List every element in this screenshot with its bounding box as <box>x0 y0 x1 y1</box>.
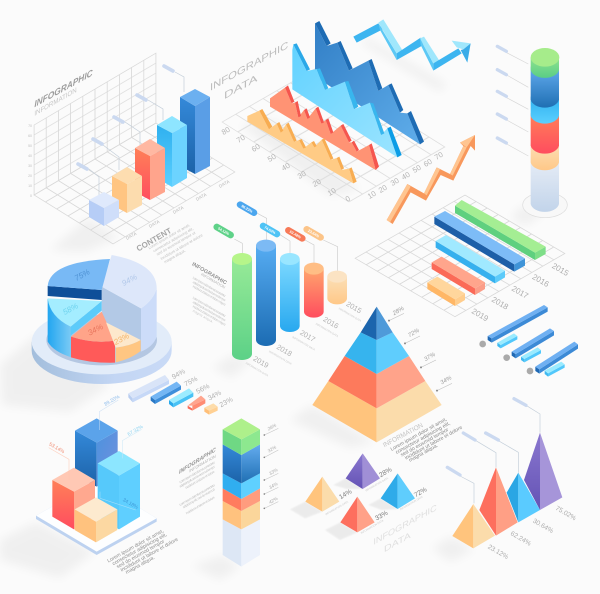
base disc <box>32 309 172 384</box>
year labels <box>470 261 571 324</box>
year labels: 2016 <box>322 315 340 331</box>
bar chart axis numbers: 10 <box>28 184 32 188</box>
bar chart axis numbers: 20 <box>28 174 32 178</box>
arrow: blue zigzag <box>353 19 471 71</box>
column text block: INFOGRAPHIC <box>179 447 216 476</box>
area chart heading <box>210 39 289 102</box>
layer orange <box>312 381 442 442</box>
mini percentage bars: 34% <box>207 390 223 402</box>
pyramid orange <box>305 477 339 512</box>
area chart axis labels: 80 <box>220 125 232 137</box>
cube labels: 34.18% <box>121 497 139 511</box>
bar chart leaders and pills <box>78 66 184 195</box>
year labels: INFORMATION DATA <box>315 322 339 338</box>
value pills <box>212 200 325 243</box>
content text block <box>135 223 203 264</box>
column text block: Lorem ipsum dolor sit amet, consectetur <box>178 483 216 507</box>
stacked cylinder leaders <box>497 46 528 156</box>
triangle values <box>486 505 577 561</box>
bar 3 red <box>135 139 165 200</box>
triangle red <box>479 467 518 536</box>
information text block: Lorem ipsum dolor sit amet, <box>390 417 448 453</box>
cylinder orange <box>327 271 347 304</box>
cube chart caption: incididunt ut labore et dolore <box>120 537 179 573</box>
pie chart <box>32 255 172 384</box>
content text block: Lorem ipsum dolor sit amet, <box>148 223 191 250</box>
year labels: 2019 <box>252 354 270 370</box>
cylinder chart text block: Lorem ipsum dolor sit amet, consectetur <box>192 296 227 318</box>
pie labels: 94% <box>120 272 139 288</box>
triangle orange <box>452 504 495 548</box>
segment orange <box>223 501 260 529</box>
cube sky <box>98 451 140 529</box>
bar chart axis numbers <box>28 124 32 198</box>
arrow: orange rising <box>387 135 475 224</box>
small pyramid labels: 14% <box>338 488 353 501</box>
triangle values: 75.02% <box>554 505 577 522</box>
value pills: 74.53% <box>263 225 277 235</box>
area chart axis labels: 10 <box>366 189 378 201</box>
cylinder green <box>232 253 252 360</box>
area chart axis labels: 70 <box>235 133 247 145</box>
column text block: Lorem ipsum dolor sit amet, consectetur <box>178 460 216 484</box>
horizontal isometric bars <box>427 200 571 324</box>
column percentages: 33% <box>268 467 279 476</box>
series orange <box>247 109 357 183</box>
cylinder chart text block <box>191 262 228 327</box>
layer red <box>328 356 425 408</box>
cube chart <box>36 394 157 555</box>
infographic data watermark: INFOGRAPHIC <box>373 502 437 547</box>
content text block: consectetur adipisicing elit, <box>152 227 194 253</box>
pyramid sky <box>381 473 415 509</box>
platform <box>36 482 157 555</box>
small pyramid labels: 72% <box>413 486 428 499</box>
year labels: 2018 <box>490 295 510 312</box>
layer navy <box>361 307 393 340</box>
small pyramid labels: INFORMATION DATA <box>324 500 349 516</box>
cylinder red <box>304 263 324 318</box>
area chart axis labels: 40 <box>280 161 292 173</box>
slice sky <box>48 298 102 357</box>
triangle values: 23.12% <box>486 544 509 561</box>
slice blue <box>48 259 110 300</box>
year labels: 2019 <box>470 307 490 324</box>
cube chart caption: magna aliqua. <box>125 555 156 576</box>
segment blue <box>223 444 260 483</box>
cube labels: 67.32% <box>127 424 145 438</box>
small pyramids <box>290 453 428 540</box>
cylinder chart <box>212 200 363 378</box>
information text block: sed do eiusmod tempor <box>400 427 450 458</box>
information text block: incididunt ut labore et dolore <box>404 425 464 461</box>
year labels: INFORMATION DATA <box>338 306 362 323</box>
pyramid red <box>340 497 375 532</box>
triangle sky <box>507 473 540 522</box>
content text block: CONTENT <box>135 226 173 253</box>
cylinder blue <box>256 240 276 346</box>
bar 2018 red <box>432 257 485 295</box>
segment green <box>223 418 260 455</box>
value pills: 53.48% <box>289 230 302 240</box>
cylinder chart text block: adipisicing elit, sed do eiusmod tempor <box>192 300 227 323</box>
segment sky <box>223 473 260 499</box>
column text block: adipisicing elit, sed do eiusmod <box>182 487 216 509</box>
column percentages: 32% <box>267 445 277 454</box>
cylinder chart text block: magna aliqua. <box>192 309 214 324</box>
cube chart caption: sed do eiusmod tempor <box>116 539 166 570</box>
column text block: incididunt ut labore et dolore <box>185 495 216 515</box>
bar chart axis numbers: 40 <box>28 154 32 158</box>
content text block: incididunt ut labore et dolore <box>160 233 203 261</box>
column percentages: 28% <box>266 423 277 432</box>
cube labels: 53.14% <box>48 442 66 455</box>
cube leaders <box>49 400 142 510</box>
information text block: consectetur adipisicing elit, <box>395 421 452 456</box>
column text block: incididunt ut labore et dolore <box>184 470 215 490</box>
pyramid purple <box>346 453 380 489</box>
small pyramid labels: INFORMATION DATA <box>399 495 424 511</box>
area chart axis labels: 0 <box>344 194 352 204</box>
cube chart caption: consectetur adipisicing elit, <box>111 532 168 567</box>
bar 2017 sky <box>436 235 505 283</box>
column percentages <box>266 423 279 505</box>
year labels: INFORMATION DATA <box>268 349 293 366</box>
bar chart data labels: DATA <box>148 219 160 229</box>
area chart heading: DATA <box>224 72 258 102</box>
slice orange <box>106 322 141 362</box>
mini percentage bars: 94% <box>171 368 187 381</box>
mini percentage bars: 56% <box>195 383 211 396</box>
bar 5 blue <box>180 89 210 174</box>
tall triangle chart <box>447 399 577 561</box>
bar 2015 green <box>455 200 546 260</box>
year labels: INFORMATION DATA <box>245 361 269 378</box>
small pyramid labels: INFORMATION DATA <box>364 476 389 493</box>
column text block: INFORMATION <box>189 454 216 474</box>
year labels: INFORMATION DATA <box>291 335 316 352</box>
small pyramid labels: 33% <box>374 510 389 522</box>
cube blue <box>75 418 118 487</box>
year labels: 2017 <box>298 328 317 344</box>
stacked square column <box>223 418 279 567</box>
year labels: 2018 <box>275 342 294 358</box>
area chart heading: INFOGRAPHIC <box>210 39 289 94</box>
pie labels: 23% <box>111 331 131 347</box>
cylinder chart text block: adipisicing elit, sed do eiusmod tempor <box>192 280 227 303</box>
base ring <box>523 192 567 218</box>
cube labels: 89.20% <box>103 394 121 408</box>
bar chart axis numbers: 50 <box>28 144 32 148</box>
cylinder chart text block: incididunt ut labore et dolore magna <box>192 304 227 327</box>
area chart axis labels: 20 <box>377 183 389 195</box>
triangle leaders <box>460 405 540 503</box>
year labels: 2015 <box>550 261 571 278</box>
content text block: sed do eiusmod tempor ut <box>156 230 197 257</box>
area chart axis labels: 70 <box>433 150 445 162</box>
information text block <box>382 417 464 464</box>
bar 2019 orange <box>427 277 465 306</box>
area chart axis labels: 60 <box>250 142 262 154</box>
heading: infographic information: INFORMATION <box>34 85 77 118</box>
triangle values: 62.24% <box>509 530 532 548</box>
bar 2 orange <box>112 167 142 213</box>
information text block: magna aliqua. <box>408 443 439 464</box>
area chart series <box>247 21 424 183</box>
infographic data watermark: DATA <box>384 530 412 554</box>
column leaders <box>264 428 278 508</box>
isometric bars <box>89 89 210 226</box>
small pyramid labels <box>324 466 428 535</box>
value pills: 23.64% <box>307 229 321 239</box>
slice periwinkle <box>102 255 157 362</box>
pie labels: 34% <box>86 322 105 338</box>
cylinder chart text block: Lorem ipsum dolor sit amet, consectetur <box>192 276 227 298</box>
pie labels: 75% <box>73 267 91 283</box>
year labels: 2015 <box>345 299 363 315</box>
cylinder leaders <box>234 213 338 271</box>
cylinder chart text block: INFOGRAPHIC <box>191 262 228 286</box>
area chart axis labels: 10 <box>326 186 338 198</box>
bar chart grid wall and floor <box>34 53 235 244</box>
area chart axis labels: 40 <box>400 170 412 182</box>
cylinder chart text block: INFORMATION <box>200 272 226 290</box>
column percentages: 34% <box>268 481 279 490</box>
column percentages: 42% <box>268 496 279 505</box>
pyramid chart <box>312 306 454 442</box>
pyramid percentages <box>391 306 454 386</box>
bar chart axis numbers: 70 <box>28 124 32 128</box>
pie labels <box>61 267 139 347</box>
mini percentage bars <box>128 368 234 415</box>
area chart axis labels: 30 <box>296 169 308 181</box>
pyramid percentages: 72% <box>407 328 421 339</box>
bar chart data labels: DATA <box>218 179 230 189</box>
bar 2016 blue <box>434 211 525 272</box>
cylinder chart text block: incididunt ut labore et dolore magna <box>192 284 227 307</box>
segment pale <box>223 519 260 567</box>
column text block: adipisicing elit, sed do eiusmod tempor <box>178 464 216 489</box>
value pills: 96.23% <box>240 204 254 214</box>
cube orange <box>75 497 117 542</box>
area chart axis labels: 60 <box>422 157 434 169</box>
area chart axis labels: 50 <box>266 152 278 164</box>
year labels: 2016 <box>531 272 551 289</box>
bar 4 sky <box>157 116 187 187</box>
column text block <box>178 447 216 515</box>
area chart axis labels: 50 <box>411 163 423 175</box>
small paired bars <box>479 305 578 377</box>
bar chart axis numbers: 30 <box>28 164 32 168</box>
pyramid percentages: 34% <box>440 375 454 386</box>
layer sky <box>345 332 409 374</box>
series dark blue <box>315 21 424 144</box>
value pills: 54.12% <box>217 226 231 236</box>
bar chart axis numbers: 0 <box>30 194 32 198</box>
cube chart caption: Lorem ipsum dolor sit amet, <box>106 528 165 564</box>
stacked cylinder <box>523 48 567 218</box>
pyramid leaders <box>389 313 452 391</box>
slice red <box>71 312 115 363</box>
mini percentage bars: 75% <box>183 376 199 388</box>
information text block: INFORMATION <box>382 422 425 449</box>
series salmon <box>270 85 379 170</box>
segment red <box>223 488 260 511</box>
triangle purple <box>524 433 562 510</box>
cylinder sky <box>280 253 300 332</box>
small pyramid labels: 28% <box>378 466 393 479</box>
bar chart data labels: DATA <box>172 205 184 215</box>
small pyramid labels: INFORMATION DATA <box>360 518 384 535</box>
bar chart data labels: DATA <box>195 192 207 202</box>
series light blue <box>292 43 402 157</box>
horizontal bar chart grid <box>355 195 565 317</box>
pie labels: 58% <box>61 301 80 317</box>
year labels <box>245 299 363 378</box>
bar chart data labels <box>125 179 230 241</box>
cube chart caption <box>106 528 179 576</box>
mini percentage bars: 23% <box>219 396 234 409</box>
area chart axis labels: 20 <box>311 177 323 189</box>
cube labels <box>48 394 145 511</box>
pyramid percentages: 28% <box>391 306 406 318</box>
heading: infographic information: INFOGRAPHIC <box>34 67 94 110</box>
area chart axis labels: 30 <box>389 176 401 188</box>
pyramid percentages: 37% <box>423 352 437 363</box>
triangle values: 30.64% <box>531 518 554 535</box>
cube red <box>52 468 95 529</box>
area chart floor grid <box>222 67 445 202</box>
year labels: 2017 <box>510 284 530 301</box>
bar 1 periwinkle <box>89 192 119 226</box>
area chart axis labels <box>220 125 445 204</box>
bar chart data labels: DATA <box>125 231 137 241</box>
content text block: magna aliqua. <box>163 249 186 264</box>
bar chart axis numbers: 60 <box>28 134 32 138</box>
